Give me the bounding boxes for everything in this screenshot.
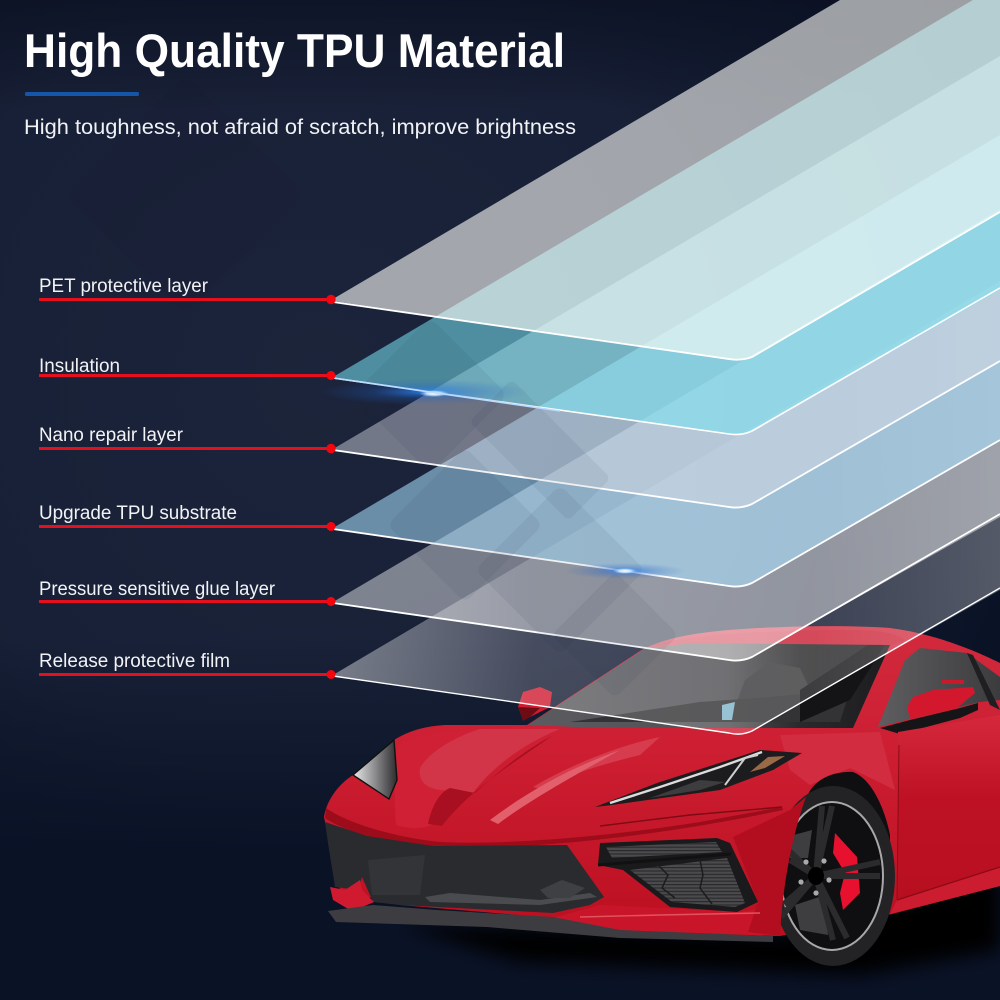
film layer 5: pressure sensitive glue layer [333,209,1000,661]
film layer 3: nano repair layer [333,56,1000,508]
film layer 2: insulation [333,0,1000,435]
window pillar [967,653,1000,710]
label: Nano repair layer [39,425,336,453]
label: Pressure sensitive glue layer [39,579,336,606]
label: Pressure sensitive glue layer: Pressure sensitive glue layer [39,579,276,600]
title: High Quality TPU Material [24,24,565,77]
label: Insulation [39,356,336,380]
fender crease [600,807,782,826]
brake caliper [833,833,860,910]
right side mirror [907,687,975,719]
side panel shading [890,715,1000,914]
label: PET protective layer: PET protective layer [39,276,209,297]
light flare: TPU substrate [565,563,685,579]
roof stripe [650,630,905,646]
wheel arch [800,772,890,900]
front lip winglet [330,880,374,910]
wheel spokes [781,806,880,940]
tire [771,786,895,966]
left headlight [353,740,397,799]
label: Upgrade TPU substrate: Upgrade TPU substrate [39,503,237,524]
front grille [325,822,604,913]
windshield [528,643,890,728]
watermark diamonds [352,317,679,699]
sports car [324,626,1000,975]
hood highlights [325,727,895,848]
lower bumper highlight [580,913,760,917]
windshield interior [570,645,885,722]
label: Release protective film: Release protective film [39,651,230,672]
lower bumper red [553,905,780,936]
label: Release protective film [39,651,336,679]
front fender over wheel [733,797,806,936]
label: Insulation: Insulation [39,356,120,377]
side window [878,648,1000,727]
subtitle: High toughness, not afraid of scratch, improve brightness [24,115,576,139]
film layer 1: PET protective layer [333,0,1000,361]
title accent bar [25,92,139,96]
wheel [771,772,895,966]
car ground shadow [400,875,1000,975]
front splitter [328,905,773,942]
rim interior highlights [790,830,828,935]
film layer 6: release protective film [333,281,1000,734]
label: Upgrade TPU substrate [39,503,336,531]
seat stripe [942,680,964,684]
right air vent [598,838,758,912]
right headlight [595,750,802,807]
rim ring [781,802,883,950]
label: PET protective layer [39,276,336,304]
side mirror base [880,703,978,734]
car body [324,626,1000,936]
label: Nano repair layer: Nano repair layer [39,425,184,446]
left side mirror [518,687,552,721]
film layer 4: upgrade TPU substrate [333,135,1000,587]
lug nuts [798,858,832,896]
light flare: insulation [320,378,560,411]
wheel hub [808,867,824,885]
